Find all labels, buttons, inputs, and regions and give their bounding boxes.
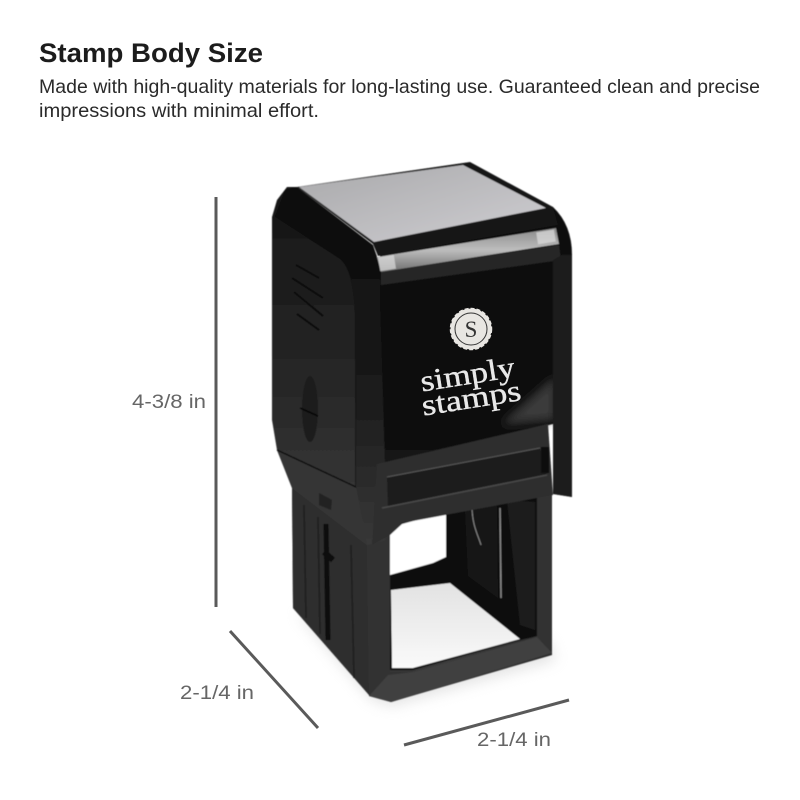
interior opening [390, 493, 537, 670]
lower base frame [292, 480, 552, 702]
dimension: depth [180, 631, 318, 728]
upper body corner [275, 187, 385, 545]
logo wordmark [416, 351, 523, 423]
upper body left side [272, 187, 385, 545]
window through the back [390, 512, 446, 575]
embossed mark [319, 493, 332, 510]
description text: impressions with minimal effort. [39, 100, 319, 122]
title: Stamp Body Size [39, 38, 263, 68]
dimension: height: 4-3/8 in [132, 392, 206, 413]
dimension: depth: 2-1/4 in [180, 683, 254, 704]
slot with index plate [372, 424, 553, 545]
dimension: width [404, 700, 569, 751]
vent lines [292, 265, 323, 330]
top window [297, 162, 559, 272]
dimension: width: 2-1/4 in [477, 730, 551, 751]
front posts and foot [367, 493, 552, 702]
logo wordmark: simply [418, 351, 517, 398]
logo wordmark: stamps [419, 374, 523, 423]
stamp body artwork [272, 162, 572, 702]
upper body front [380, 207, 572, 497]
stamp product [272, 162, 572, 706]
description text: Made with high-quality materials for long-lasting use. Guaranteed clean and precise [39, 76, 760, 98]
description text [39, 76, 760, 122]
logo badge: S [465, 317, 477, 342]
paper floor [391, 583, 520, 668]
side button [302, 376, 318, 442]
logo [416, 308, 523, 423]
